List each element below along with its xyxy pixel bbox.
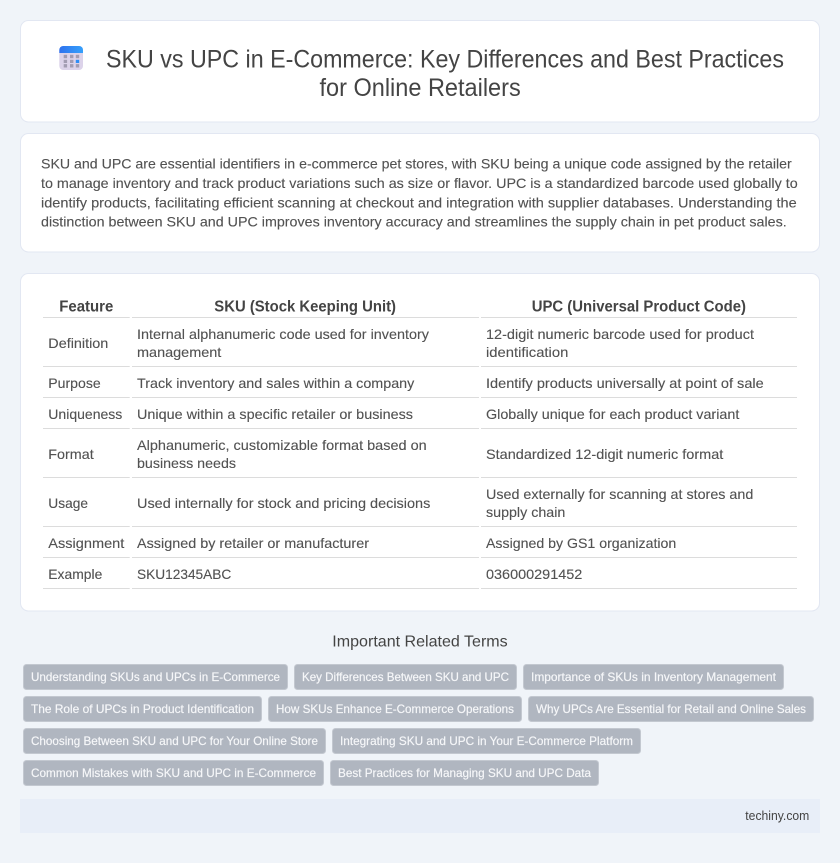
table row: Definition: Definition	[48, 335, 108, 351]
tag	[528, 696, 814, 722]
tag	[24, 696, 262, 722]
table row: Format: Standardized 12-digit numeric format	[486, 446, 723, 462]
table row: Assignment	[43, 535, 797, 558]
icon: calendar	[59, 46, 83, 70]
table row: Example: SKU12345ABC	[137, 566, 231, 582]
table row: Uniqueness: Unique within a specific retailer or business	[137, 406, 413, 422]
table row: Usage: Used internally for stock and pricing decisions	[137, 495, 430, 511]
panel: related term tags	[24, 664, 814, 786]
table row: Purpose: Purpose	[48, 375, 101, 391]
table row: Assignment: Assignment	[48, 535, 124, 551]
tag: How SKUs Enhance E-Commerce Operations	[276, 702, 514, 716]
tag: Best Practices for Managing SKU and UPC Data	[338, 766, 591, 780]
table row: Format: Format	[48, 446, 94, 462]
table row: Format: Alphanumeric, customizable format based on	[137, 437, 427, 453]
table header row: Feature	[59, 299, 114, 316]
title: for Online Retailers	[320, 74, 521, 102]
table row: Format	[43, 437, 797, 478]
table row: Definition: Internal alphanumeric code used for inventory	[137, 326, 429, 342]
tag	[24, 728, 326, 754]
text block: introduction: SKU and UPC are essential identifiers in e-commerce pet stores, with SKU being a unique code assigned by the retailer	[41, 155, 792, 171]
panel: title header	[20, 20, 820, 122]
tag	[24, 664, 288, 690]
heading: Important Related Terms: Important Related Terms	[332, 634, 508, 651]
table row: Usage: Usage	[48, 495, 88, 511]
footer: techiny.com	[745, 809, 809, 823]
table row: Purpose	[43, 375, 797, 398]
tag	[24, 760, 324, 786]
table header row: SKU (Stock Keeping Unit)	[214, 299, 396, 316]
tag	[524, 664, 784, 690]
title	[106, 46, 784, 102]
table row: Uniqueness: Uniqueness	[48, 406, 122, 422]
table row: Definition: management	[137, 344, 221, 360]
table row: Definition	[43, 326, 797, 367]
tag	[330, 760, 598, 786]
table row: Usage: supply chain	[486, 504, 565, 520]
table row: Example: 036000291452	[486, 566, 583, 582]
table row: Usage	[43, 486, 797, 527]
tag: Integrating SKU and UPC in Your E-Commerce Platform	[340, 734, 633, 748]
table row: Format: business needs	[137, 455, 236, 471]
title: SKU vs UPC in E-Commerce: Key Differences and Best Practices	[106, 46, 784, 74]
table row: Usage: Used externally for scanning at stores and	[486, 486, 753, 502]
text block: introduction: distinction between SKU and UPC improves inventory accuracy and streamlines the supply chain in pet product sales.	[41, 214, 787, 230]
text block: introduction: identify products, facilitating efficient scanning at checkout and integration with supplier databases. Understanding the	[41, 194, 797, 210]
tag: Choosing Between SKU and UPC for Your Online Store	[31, 734, 318, 748]
text block: introduction	[41, 155, 798, 230]
table row: Definition: identification	[486, 344, 568, 360]
table row: Purpose: Identify products universally at point of sale	[486, 375, 764, 391]
table row: Uniqueness: Globally unique for each product variant	[486, 406, 739, 422]
panel: comparison table	[20, 274, 820, 611]
tag	[268, 696, 522, 722]
footer	[20, 799, 820, 833]
table row: Purpose: Track inventory and sales within a company	[137, 375, 414, 391]
table row: Example: Example	[48, 566, 103, 582]
table row: Definition: 12-digit numeric barcode used for product	[486, 326, 754, 342]
tag: Importance of SKUs in Inventory Management	[531, 670, 777, 684]
tag: Why UPCs Are Essential for Retail and Online Sales	[536, 702, 806, 716]
tag: Common Mistakes with SKU and UPC in E-Commerce	[31, 766, 316, 780]
tag: The Role of UPCs in Product Identification	[31, 702, 254, 716]
table row: Example	[43, 566, 797, 589]
table row: Assignment: Assigned by GS1 organization	[486, 535, 676, 551]
table header row: UPC (Universal Product Code)	[532, 299, 746, 316]
tag	[332, 728, 640, 754]
table header row	[43, 299, 797, 318]
tag: Understanding SKUs and UPCs in E-Commerce	[31, 670, 280, 684]
panel: introduction paragraph	[20, 134, 820, 252]
tag	[294, 664, 516, 690]
table row: Uniqueness	[43, 406, 797, 429]
text block: introduction: to manage inventory and track product variations such as size or flavor. UPC is a standardized barcode used globally to	[41, 175, 798, 191]
table row: Assignment: Assigned by retailer or manufacturer	[137, 535, 369, 551]
tag: Key Differences Between SKU and UPC	[302, 670, 509, 684]
